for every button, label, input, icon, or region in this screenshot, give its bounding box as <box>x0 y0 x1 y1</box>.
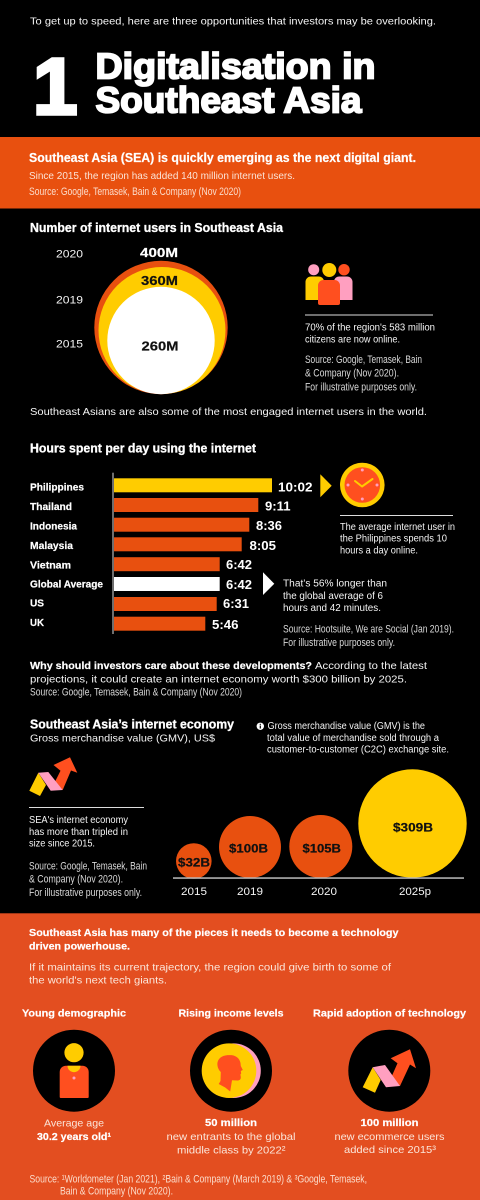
text block: tripled in size: For illustrative purposes only. <box>29 887 142 899</box>
bar chart: hours per day: US <box>30 599 44 610</box>
bubble chart: GMV: 2019 <box>237 886 263 898</box>
text block: why investors should care: Source: Google, Temasek, Bain & Company (Nov 2020) <box>30 687 242 699</box>
text block: tripled in size: & Company (Nov 2020). <box>29 874 123 886</box>
text block: global comparison: That’s 56% longer than <box>283 579 387 590</box>
chart: nested circles of internet users: 2015 <box>56 339 83 351</box>
column: young demographic: Average age <box>44 1118 104 1130</box>
text block: sources: Bain & Company (Nov 2020). <box>60 1186 173 1198</box>
text block: sources <box>30 1174 367 1198</box>
text block: why investors should care: Why should investors care about these developments? <box>30 660 312 672</box>
title heading <box>96 46 376 120</box>
chart: nested circles of internet users: 400M <box>140 246 178 260</box>
text block: global comparison <box>283 579 454 649</box>
bar chart: hours per day: 6:31 <box>223 597 249 611</box>
column: rising income: new entrants to the global <box>166 1131 296 1143</box>
text block: 70% online: citizens are now online. <box>305 334 400 345</box>
chart: nested circles of internet users: 360M <box>141 274 178 288</box>
column: rapid adoption: added since 2015³ <box>344 1144 437 1156</box>
text block: why investors should care <box>30 660 427 699</box>
text block: powerhouse intro <box>29 927 399 987</box>
chart: nested circles of internet users: 2020 <box>56 249 83 261</box>
panel: digital giant banner <box>0 137 480 208</box>
text block: 70% online <box>305 323 435 393</box>
panel: technology powerhouse <box>0 913 480 1200</box>
heading: internet economy: Southeast Asia’s internet economy <box>30 718 234 732</box>
text block: global comparison: hours and 42 minutes. <box>283 603 381 614</box>
title heading: Digitalisation in <box>96 46 376 86</box>
bar chart: hours per day: Global Average <box>30 580 103 591</box>
heading: internet economy <box>30 718 234 745</box>
bubble chart: GMV: 2015 <box>181 886 207 898</box>
icon: growth arrow <box>363 1049 416 1093</box>
text block: tripled in size <box>29 815 147 899</box>
text block: tripled in size: Source: Google, Temasek, Bain <box>29 860 147 872</box>
text block: why investors should care: According to the latest <box>315 660 427 672</box>
bar chart: hours per day: UK <box>30 618 45 629</box>
bubble chart: GMV: 2020 <box>311 886 337 898</box>
text: engaged users: Southeast Asians are also some of the most engaged internet users in the world. <box>30 406 427 418</box>
text block: 70% online: 70% of the region's 583 million <box>305 323 435 334</box>
icon: head silhouette coin <box>202 1043 261 1098</box>
text block: powerhouse intro: the world's next tech giants. <box>29 975 167 987</box>
bar chart: hours per day: Indonesia <box>30 522 77 533</box>
column: rising income: 50 million <box>205 1117 257 1129</box>
icon: person <box>60 1043 89 1098</box>
panel: digital giant banner: Southeast Asia (SEA) is quickly emerging as the next digital giant. <box>29 151 416 165</box>
text block: GMV definition <box>267 721 449 756</box>
chart: nested circles of internet users: 260M <box>142 340 178 354</box>
column: rapid adoption: new ecommerce users <box>334 1131 444 1143</box>
bubble chart: GMV: $32B <box>178 857 210 869</box>
column: rapid adoption: Rapid adoption of technology <box>313 1008 466 1020</box>
text block: 70% online: For illustrative purposes only. <box>305 381 417 393</box>
heading: internet users: Number of internet users in Southeast Asia <box>30 221 284 235</box>
text block: Philippines: The average internet user in <box>340 522 455 533</box>
column: young demographic: 30.2 years old¹ <box>37 1131 111 1143</box>
text block: tripled in size: SEA's internet economy <box>29 815 128 826</box>
bar chart: hours per day <box>30 473 313 634</box>
heading: hours spent: Hours spent per day using the internet <box>30 441 257 455</box>
icon: clock <box>340 463 385 507</box>
text block: powerhouse intro: Southeast Asia has many of the pieces it needs to become a technology <box>29 927 399 939</box>
text block: GMV definition: Gross merchandise value (GMV) is the <box>268 721 425 732</box>
text block: Philippines: hours a day online. <box>340 545 418 556</box>
arrow: yellow <box>320 474 332 497</box>
column: rising income: Rising income levels <box>178 1008 284 1020</box>
bar chart: hours per day: Vietnam <box>30 560 71 571</box>
chart: nested circles of internet users: 2019 <box>56 295 83 307</box>
bubble chart: GMV: $100B <box>229 843 268 855</box>
bar chart: hours per day: 5:46 <box>212 618 239 632</box>
icon: people <box>306 263 352 305</box>
column: rising income: middle class by 2022² <box>177 1144 286 1156</box>
bubble chart: GMV <box>173 769 467 898</box>
icon: info <box>257 723 264 730</box>
title heading: Southeast Asia <box>96 80 363 120</box>
text block: tripled in size: size since 2015. <box>29 839 95 850</box>
text block: global comparison: For illustrative purposes only. <box>283 637 395 649</box>
text block: powerhouse intro: If it maintains its current trajectory, the region could give birth to some of <box>29 962 391 974</box>
text block: Philippines: the Philippines spends 10 <box>340 534 447 545</box>
column: rising income <box>166 1008 296 1156</box>
chart: nested circles of internet users <box>56 246 228 394</box>
intro text: To get up to speed, here are three opportunities that investors may be overlooking. <box>30 16 436 28</box>
title <box>33 42 376 131</box>
bar chart: hours per day: Thailand <box>30 502 72 513</box>
bar chart: hours per day: 8:36 <box>256 519 282 533</box>
text block: powerhouse intro: driven powerhouse. <box>29 940 130 952</box>
heading: internet economy: Gross merchandise value (GMV), US$ <box>30 733 215 745</box>
column: rapid adoption: 100 million <box>360 1117 418 1129</box>
bar chart: hours per day: 6:42 <box>226 558 252 572</box>
section number: 1 <box>33 42 78 131</box>
text block: 70% online: Source: Google, Temasek, Bain <box>305 354 422 366</box>
text block: GMV definition: total value of merchandise sold through a <box>267 733 439 744</box>
text block: why investors should care: projections, it could create an internet economy worth $300 billion by 2025. <box>30 673 407 685</box>
text block: GMV definition: customer-to-customer (C2C) exchange site. <box>267 745 449 756</box>
bar chart: hours per day: Malaysia <box>30 541 73 552</box>
bar chart: hours per day: 8:05 <box>250 539 276 553</box>
text block: sources: Source: ¹Worldometer (Jan 2021), ²Bain & Company (March 2019) & ³Google, Temasek, <box>30 1174 367 1186</box>
icon: growth arrow <box>29 757 77 796</box>
bar chart: hours per day: 9:11 <box>265 500 291 514</box>
text block: global comparison: the global average of 6 <box>283 591 383 602</box>
bar chart: hours per day: 6:42 <box>226 578 252 592</box>
column: young demographic <box>22 1008 126 1143</box>
bar chart: hours per day: Philippines <box>30 483 84 494</box>
panel: digital giant banner: Since 2015, the region has added 140 million internet users. <box>29 171 295 182</box>
column: young demographic: Young demographic <box>22 1008 126 1020</box>
text block: 70% online: & Company (Nov 2020). <box>305 368 399 380</box>
column: rapid adoption <box>313 1008 466 1156</box>
bar chart: hours per day: 10:02 <box>278 480 313 494</box>
text block: tripled in size: has more than tripled in <box>29 827 128 838</box>
bubble chart: GMV: $309B <box>393 823 433 835</box>
panel: digital giant banner: Source: Google, Temasek, Bain & Company (Nov 2020) <box>29 186 241 198</box>
bubble chart: GMV: 2025p <box>399 886 431 898</box>
bubble chart: GMV: $105B <box>302 843 341 855</box>
arrow: white <box>263 572 274 595</box>
text block: Philippines <box>340 522 455 556</box>
